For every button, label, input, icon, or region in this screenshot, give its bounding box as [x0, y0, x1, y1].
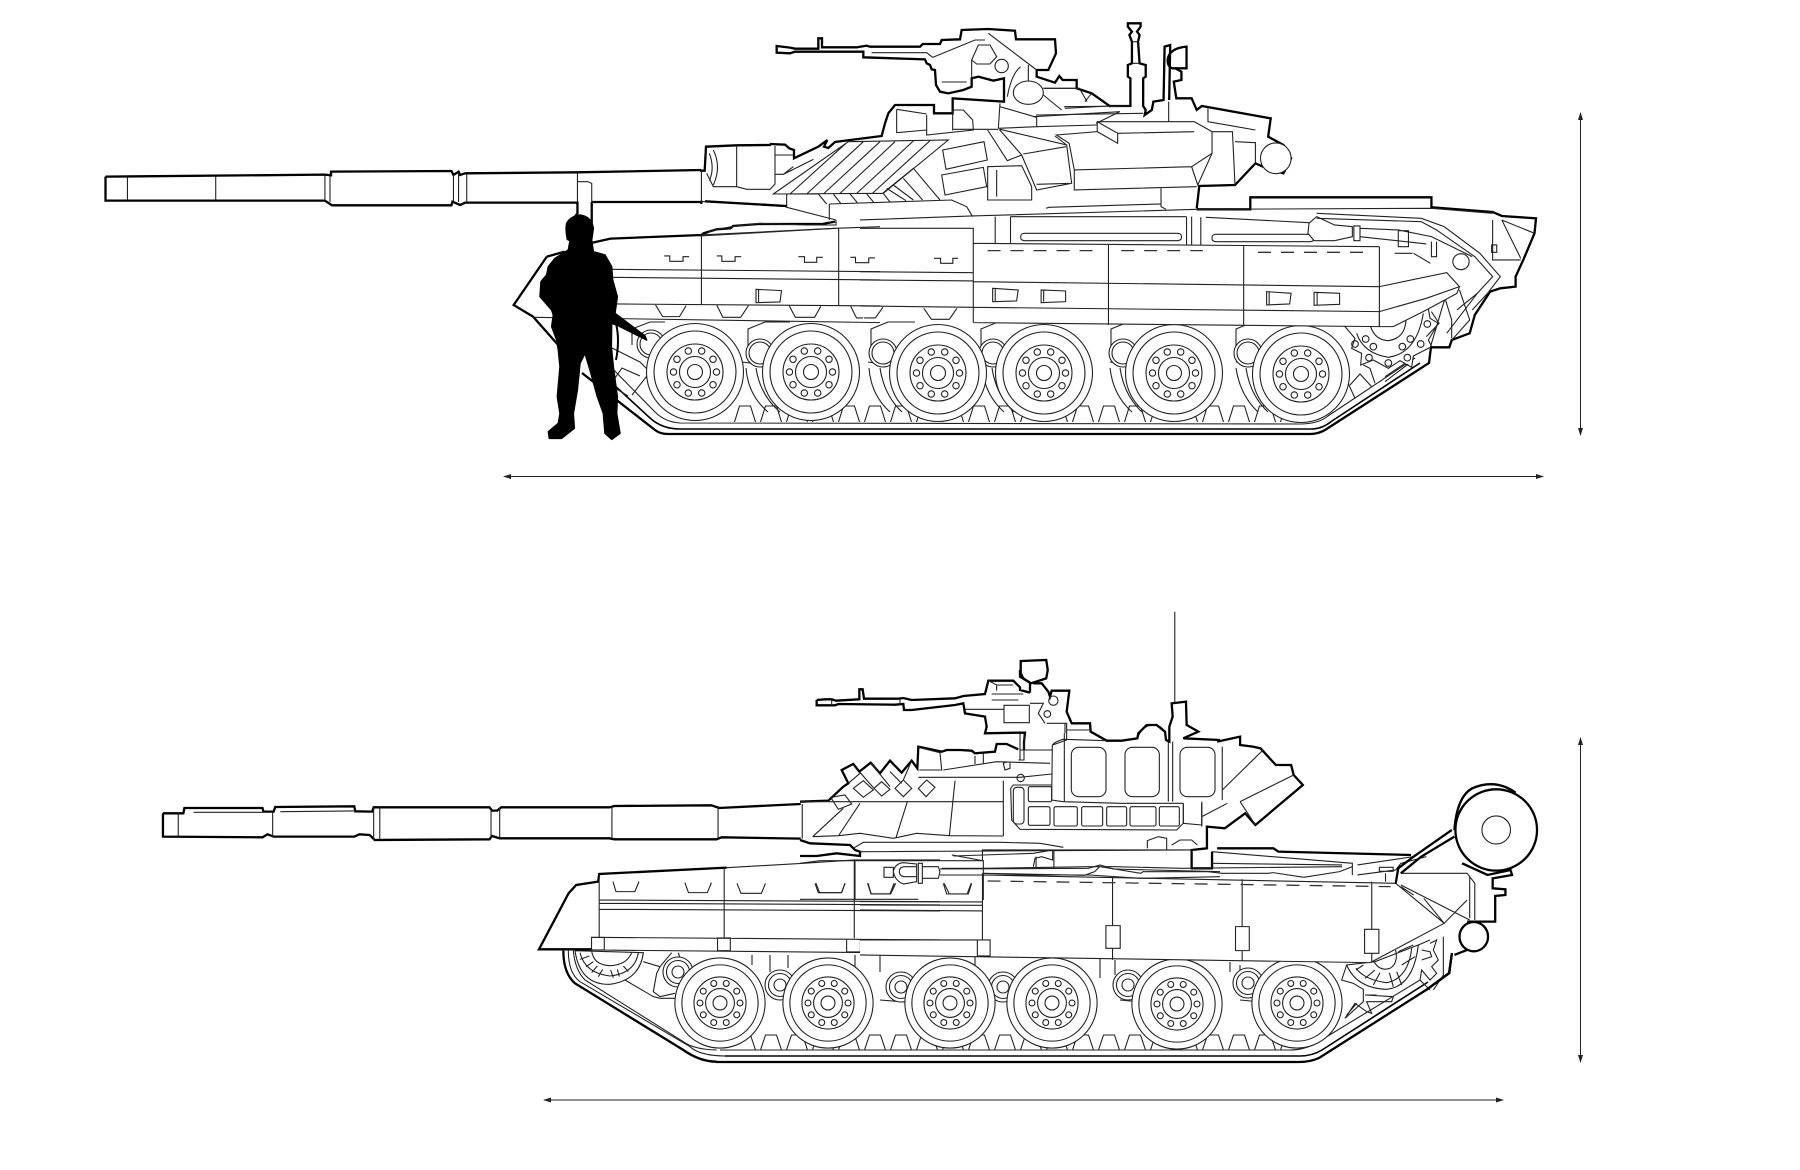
tank 1 turret rear, antenna mast and sight: [1036, 23, 1291, 209]
tank 1 running gear: [582, 298, 1452, 434]
dimension arrow: tank 2 height: [1578, 737, 1583, 1063]
tank 2 running gear: [563, 937, 1452, 1062]
tank 2 rear sprocket: [1342, 937, 1443, 1018]
rear drum mount: [1396, 830, 1454, 883]
tank 1: side view with soldier: [106, 23, 1536, 439]
rear fuel ball: [1459, 922, 1488, 951]
dimension arrow: tank 1 length: [503, 474, 1544, 479]
tank 2 hull front: [539, 860, 940, 953]
tank 1 return rollers and suspension: [632, 322, 1280, 412]
rear drum: [1455, 789, 1537, 871]
tank 2 track and front idler: [563, 951, 727, 1062]
soldier silhouette: [540, 215, 647, 439]
turret interior panels and stowage boxes: [800, 681, 1220, 900]
tank 2 road wheels: [675, 958, 1342, 1049]
tank 1 road wheels: [646, 324, 1350, 422]
turret outline, machine gun and smoke launchers: [800, 670, 1220, 856]
turret hull clevis fitting: [884, 863, 940, 884]
tank 2 turret: [800, 670, 1220, 900]
tank 1 rear drive sprocket: [1345, 298, 1452, 398]
tank 2 return rollers and suspension: [663, 955, 1263, 1002]
tank 1 hull front and skirts: [514, 222, 880, 347]
tank 2: side view with rear drum: [163, 612, 1537, 1062]
tank 1 track: [582, 345, 1431, 434]
turret interior panel lines and hatched armour: [700, 33, 1120, 236]
turret outline and machine gun: [700, 29, 1111, 171]
dimension arrow: tank 1 height: [1578, 112, 1583, 436]
radio antenna: [1174, 612, 1176, 703]
tank 2 main gun barrel: [163, 804, 802, 840]
tank 2 track rear run: [716, 953, 1452, 1062]
tank 1 main gun barrel: [106, 170, 787, 227]
tank 1 turret upper: [700, 29, 1120, 236]
dimension arrow: tank 2 length: [543, 1098, 1504, 1102]
tank 2 hull rear, sight, bustle basket and drum: [860, 612, 1537, 990]
tank 1 hull rear and skirts: [860, 197, 1536, 347]
